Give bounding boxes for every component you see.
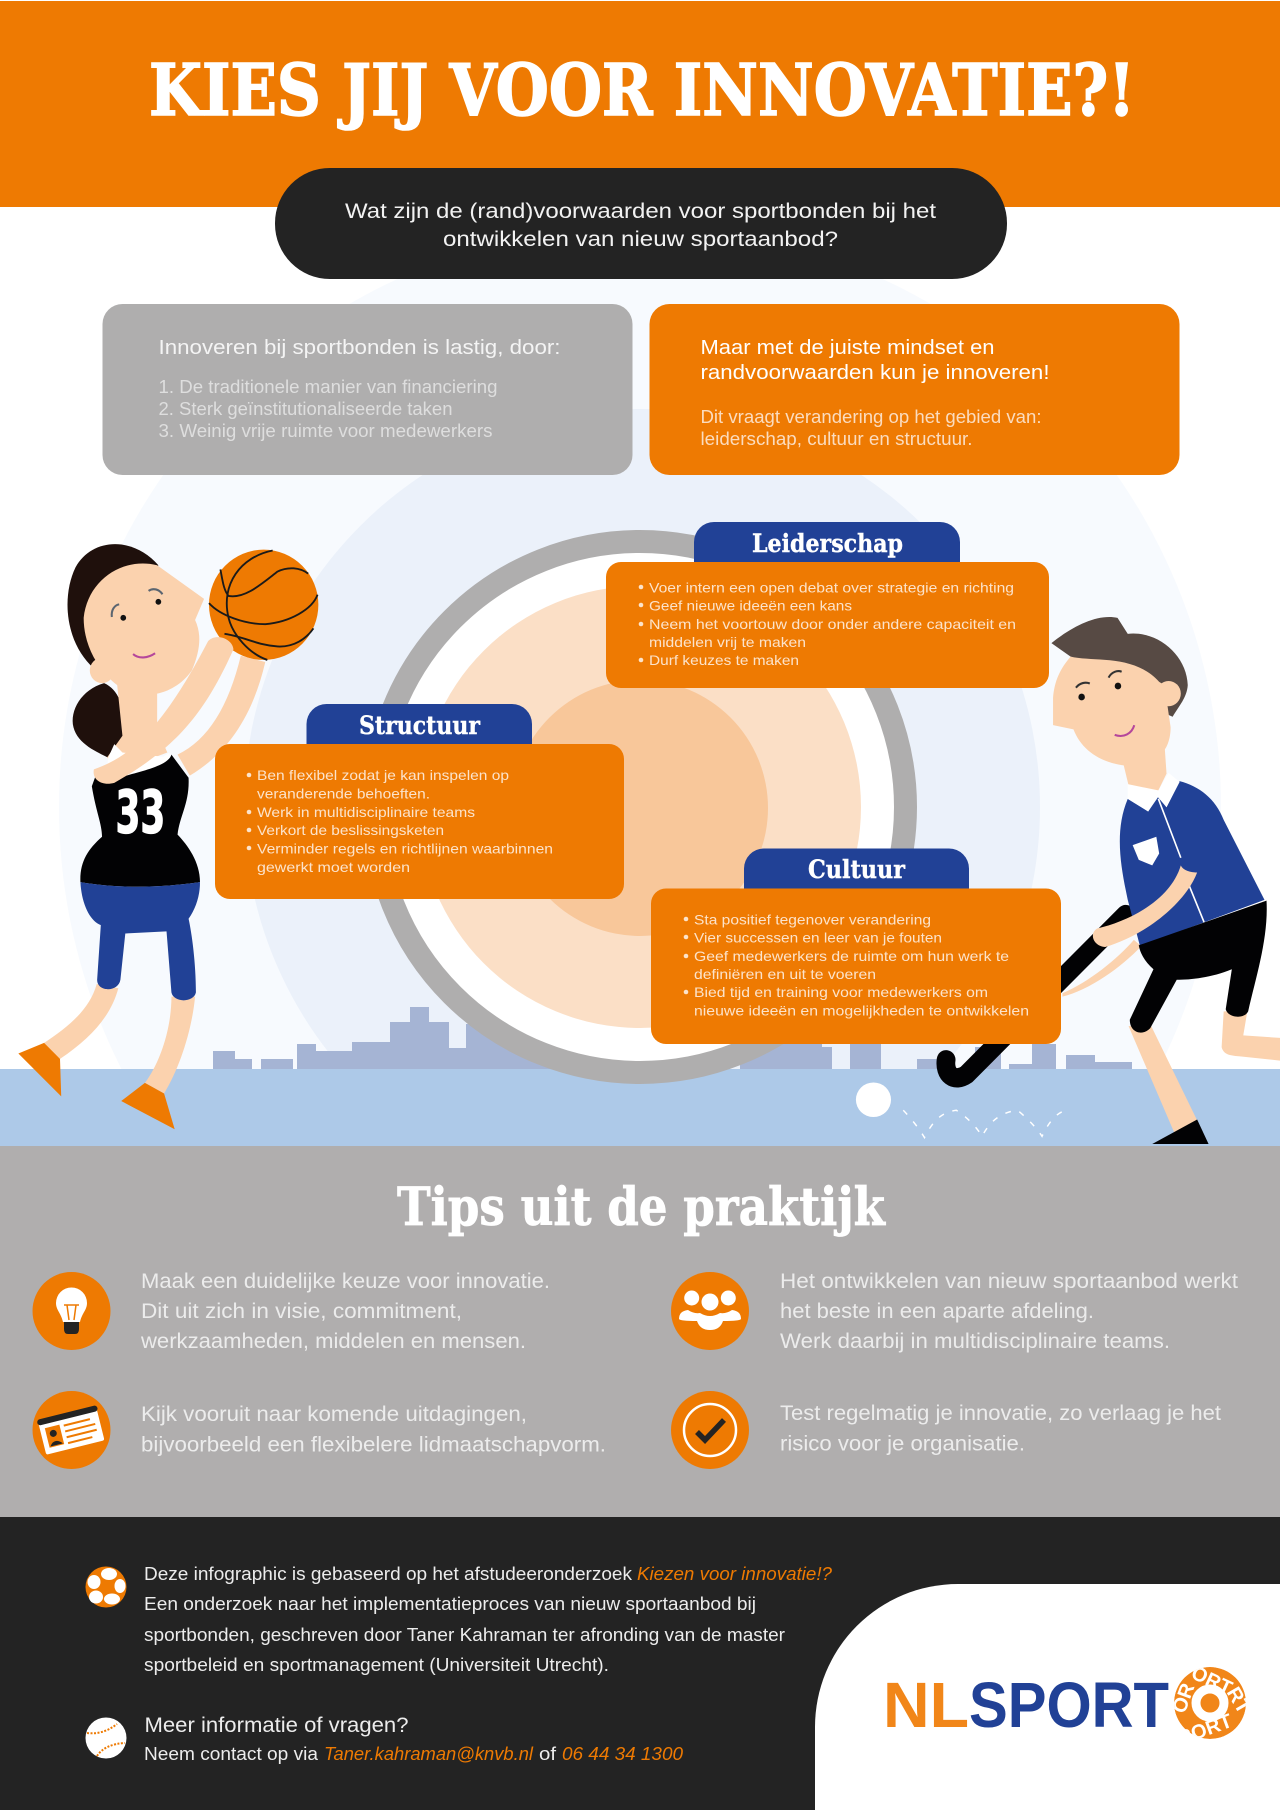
icon: check mark	[671, 1391, 749, 1469]
question pill: ontwikkelen van nieuw sportaanbod?	[443, 228, 838, 251]
panel: Structuur: Werk in multidisciplinaire teams	[257, 804, 475, 820]
tip text: keuze: Maak een duidelijke keuze voor innovatie.	[141, 1270, 550, 1293]
panel: obstacles: 1. De traditionele manier van financiering	[158, 376, 498, 397]
tip text: keuze	[140, 1270, 550, 1353]
logo: NLSPORT: OR	[1168, 1680, 1200, 1716]
panel: Structuur: Structuur	[359, 711, 481, 740]
ground	[0, 1069, 1280, 1146]
panel: Structuur: Ben flexibel zodat je kan inspelen op	[257, 767, 509, 783]
source text: sportbeleid en sportmanagement (Universiteit Utrecht).	[144, 1655, 609, 1675]
source text: Kiezen voor innovatie!?	[637, 1564, 832, 1584]
character: basketball player	[18, 544, 318, 1129]
tip text: afdeling: het beste in een aparte afdeling.	[780, 1300, 1094, 1323]
icon: baseball	[86, 1718, 126, 1758]
panel: footer background	[0, 1517, 1280, 1810]
panel: tips background	[0, 1146, 1280, 1518]
tip text: testen: risico voor je organisatie.	[780, 1432, 1025, 1456]
character: basketball player: 33	[116, 778, 165, 847]
character: hockey player	[856, 617, 1280, 1144]
panel: Cultuur: Bied tijd en training voor medewerkers om	[694, 984, 988, 1000]
logo: NLSPORT	[887, 1667, 1246, 1739]
panel: Cultuur: Sta positief tegenover verandering	[694, 912, 931, 928]
panel: Structuur: gewerkt moet worden	[257, 859, 410, 875]
header band	[0, 1, 1280, 207]
source text: Een onderzoek naar het implementatieproces van nieuw sportaanbod bij	[144, 1594, 756, 1614]
panel: Structuur	[215, 704, 624, 899]
tip text: afdeling: Werk daarbij in multidisciplinaire teams.	[780, 1330, 1170, 1353]
panel: obstacles	[102, 304, 632, 475]
panel: Cultuur: Geef medewerkers de ruimte om hun werk te	[694, 948, 1009, 964]
panel: Cultuur: nieuwe ideeën en mogelijkheden te ontwikkelen	[694, 1002, 1029, 1018]
question pill: Wat zijn de (rand)voorwaarden voor sportbonden bij het	[345, 200, 936, 223]
title: KIES JIJ VOOR INNOVATIE?!	[149, 48, 1135, 132]
contact text	[144, 1714, 683, 1764]
panel: Cultuur	[651, 848, 1061, 1044]
icon: football	[86, 1566, 126, 1608]
logo: NLSPORT: NL	[883, 1669, 969, 1741]
source text: Deze infographic is gebaseerd op het afstudeeronderzoek	[144, 1564, 633, 1584]
contact text: Meer informatie of vragen?	[144, 1714, 408, 1737]
panel: Cultuur: Cultuur	[808, 855, 906, 884]
tip text: afdeling	[780, 1270, 1238, 1353]
panel: Cultuur: definiëren en uit te voeren	[694, 966, 876, 982]
bounce trail	[903, 1110, 1067, 1138]
logo: NLSPORT: RT	[1222, 1683, 1254, 1718]
contact text: 06 44 34 1300	[562, 1744, 683, 1764]
panel: Structuur: Verminder regels en richtlijnen waarbinnen	[257, 840, 553, 856]
icon: membership card	[32, 1391, 110, 1469]
source text	[144, 1564, 832, 1675]
tip text: vooruit	[141, 1403, 606, 1456]
panel: Structuur: Verkort de beslissingsketen	[257, 822, 444, 838]
white logo corner panel	[815, 1584, 1280, 1810]
panel: Leiderschap: Neem het voortouw door onder andere capaciteit en	[649, 616, 1016, 632]
panel: Cultuur: Vier successen en leer van je fouten	[694, 930, 942, 946]
contact text: Taner.kahraman@knvb.nl	[324, 1744, 534, 1764]
panel: mindset: randvoorwaarden kun je innoveren!	[700, 361, 1050, 384]
tip text: vooruit: bijvoorbeeld een flexibelere lidmaatschapvorm.	[141, 1434, 606, 1456]
tip text: testen	[780, 1402, 1221, 1456]
source text: sportbonden, geschreven door Taner Kahraman ter afronding van de master	[144, 1625, 785, 1645]
panel: mindset: leiderschap, cultuur en structuur.	[700, 428, 972, 449]
heading: tips: Tips uit de praktijk	[397, 1177, 886, 1238]
icon: light bulb	[32, 1272, 110, 1350]
panel: obstacles: 3. Weinig vrije ruimte voor medewerkers	[158, 420, 492, 441]
contact text: Neem contact op via	[144, 1744, 319, 1764]
concentric target circles	[374, 542, 906, 1072]
icon: basketball	[209, 550, 318, 660]
panel: mindset: Maar met de juiste mindset en	[700, 336, 994, 359]
tip text: keuze: Dit uit zich in visie, commitment,	[141, 1300, 462, 1323]
panel: Leiderschap	[606, 522, 1049, 688]
logo: NLSPORT: ORT	[1188, 1662, 1235, 1700]
icon: hockey stick	[946, 915, 1126, 1078]
panel: Leiderschap: Voer intern een open debat over strategie en richting	[649, 580, 1014, 596]
panel: Leiderschap: middelen vrij te maken	[649, 634, 806, 650]
panel: mindset: Dit vraagt verandering op het gebied van:	[700, 406, 1042, 427]
tip text: keuze: werkzaamheden, middelen en mensen.	[140, 1330, 526, 1353]
contact text: of	[539, 1744, 557, 1764]
panel: mindset	[650, 304, 1180, 475]
tip text: afdeling: Het ontwikkelen van nieuw sportaanbod werkt	[780, 1270, 1238, 1293]
panel: Structuur: veranderende behoeften.	[257, 786, 430, 802]
panel: obstacles: Innoveren bij sportbonden is lastig, door:	[158, 336, 560, 359]
panel: obstacles: 2. Sterk geïnstitutionaliseerde taken	[158, 398, 452, 419]
icon: team	[671, 1272, 749, 1350]
logo: NLSPORT: PORT	[1175, 1710, 1235, 1750]
tip text: testen: Test regelmatig je innovatie, zo verlaag je het	[780, 1402, 1221, 1425]
tip text: vooruit: Kijk vooruit naar komende uitdagingen,	[141, 1403, 527, 1426]
background circles	[59, 226, 1221, 1388]
city skyline	[213, 1007, 1132, 1069]
panel: Leiderschap: Leiderschap	[752, 529, 903, 558]
panel: Leiderschap: Geef nieuwe ideeën een kans	[649, 598, 852, 614]
icon: hockey ball	[856, 1082, 891, 1117]
question pill	[275, 168, 1007, 279]
logo: NLSPORT: SPORT	[969, 1669, 1169, 1741]
panel: Leiderschap: Durf keuzes te maken	[649, 652, 799, 668]
